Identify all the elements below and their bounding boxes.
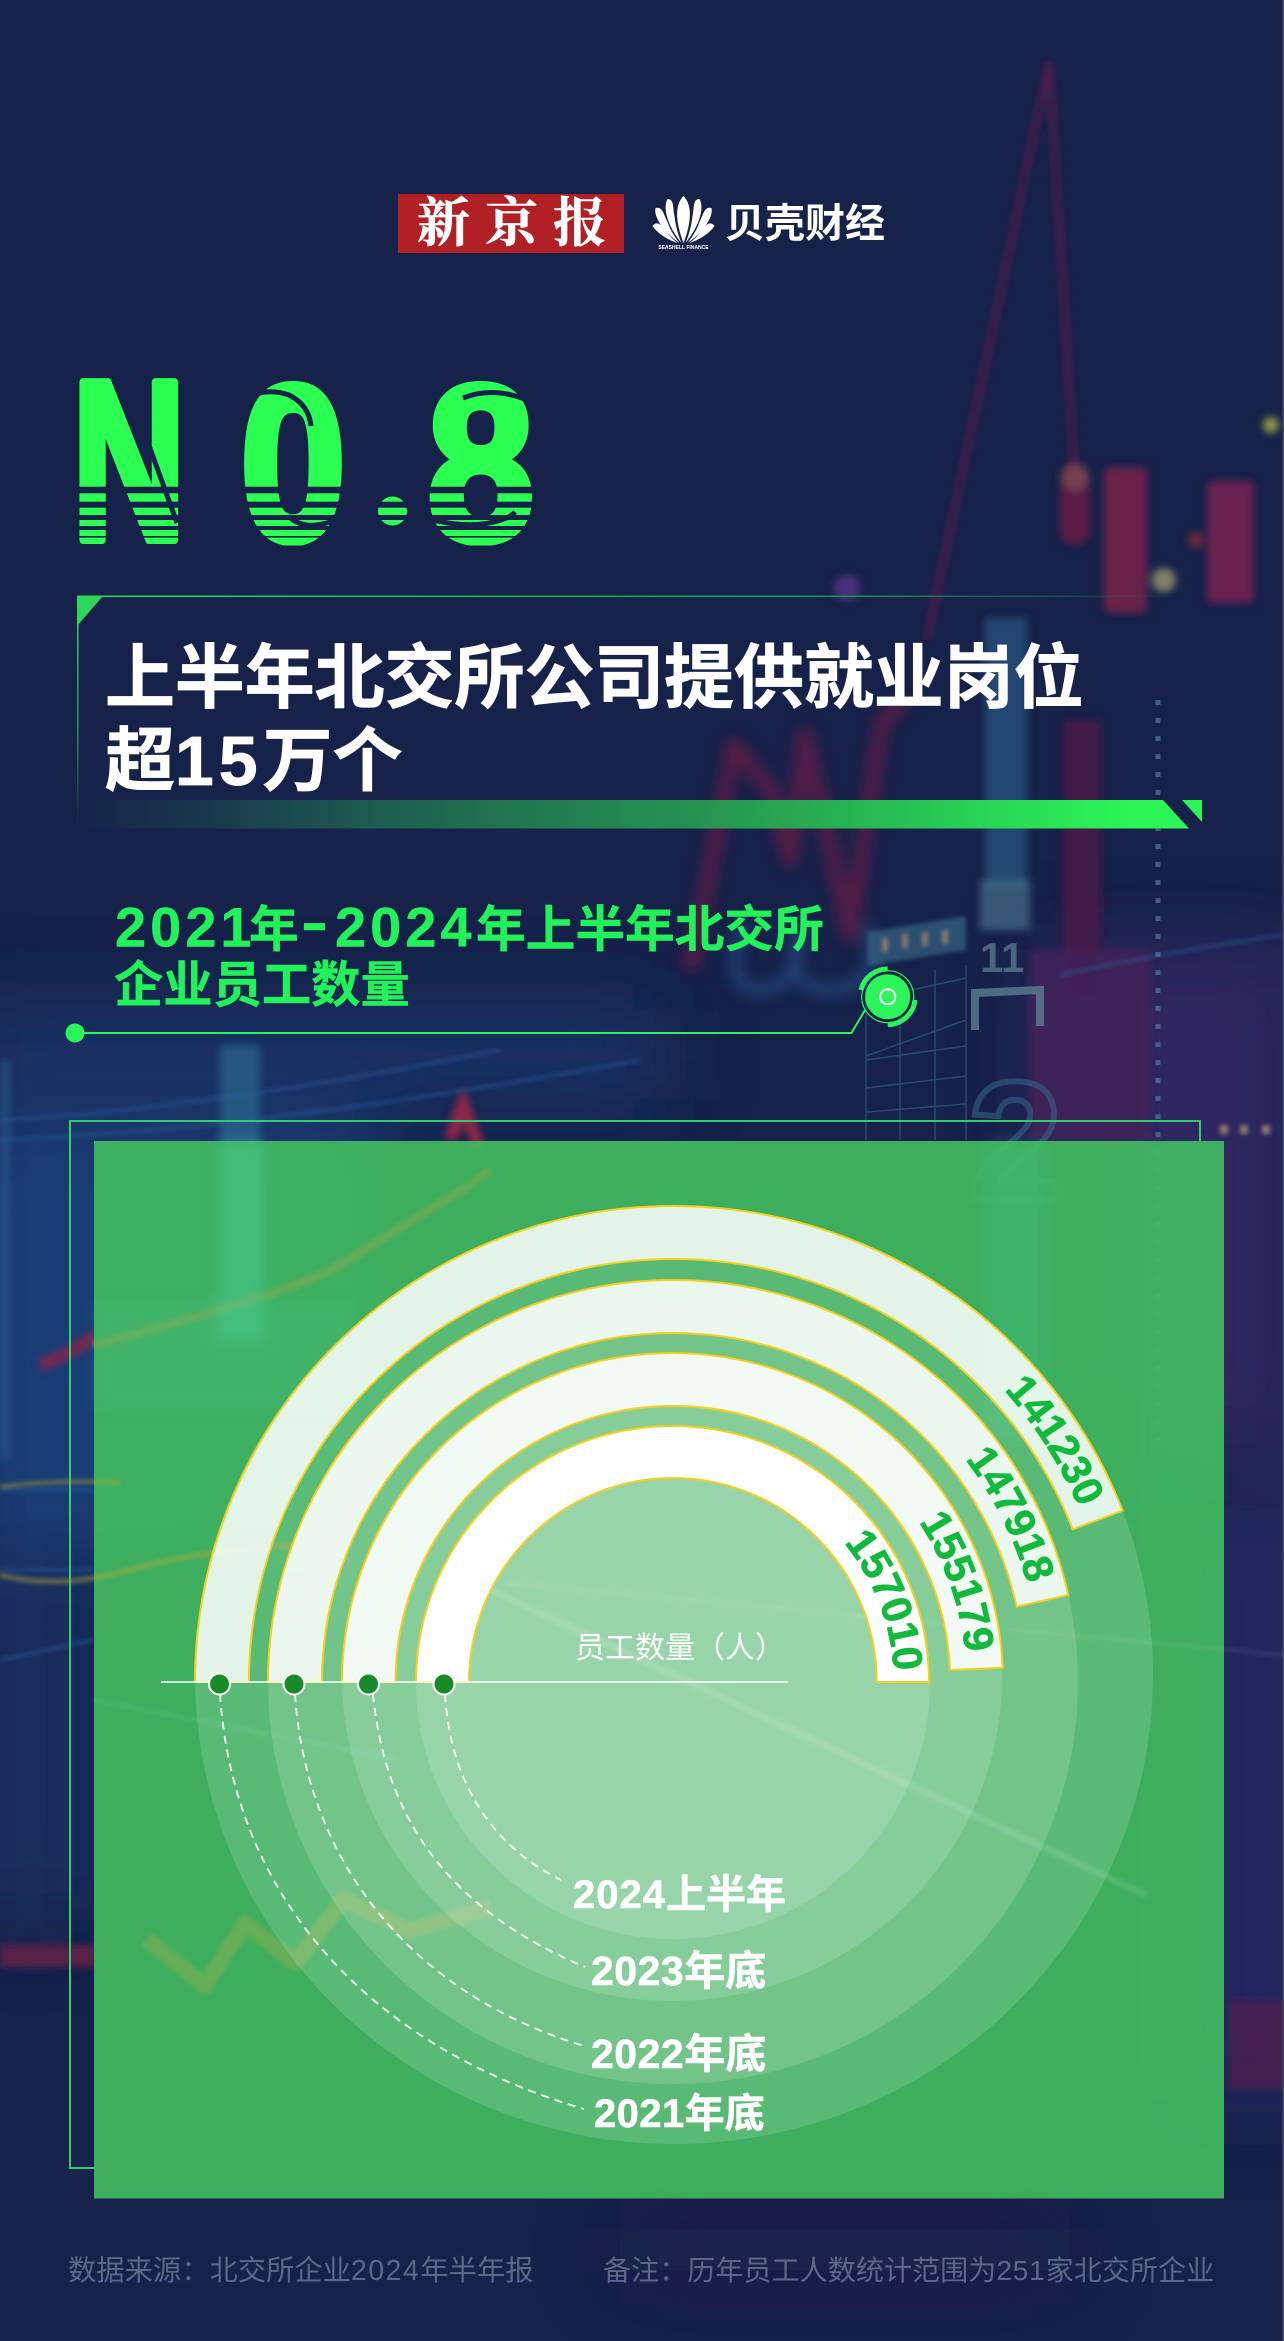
title panel frame — [77, 596, 1202, 828]
year labels: 2023年底 — [591, 1948, 766, 1994]
chart: radial bar 2022 — [267, 1279, 1070, 1683]
outer frame of chart — [70, 1121, 1200, 2168]
background numerals — [968, 934, 1063, 1237]
year labels: 2024上半年 — [573, 1873, 786, 1917]
chart: radial bar 2023: 155179 — [920, 1512, 994, 1650]
panel texture: teal tint from photo — [94, 1141, 1224, 1501]
subtitle: 年 — [249, 902, 299, 958]
subtitle leader line and target icon — [66, 969, 915, 1042]
subtitle: 企业员工数量 — [114, 958, 410, 1013]
chart: radial bar 2024: 157010 — [845, 1530, 922, 1669]
background numerals: 2 — [968, 1047, 1063, 1237]
title — [105, 639, 1083, 800]
icon: seashell: SEASHELL FINANCE — [658, 245, 709, 251]
axis dots — [209, 1674, 454, 1694]
accent bar — [77, 800, 1189, 828]
chart: concentric circles — [195, 1206, 1153, 2144]
footer: note: 备注：历年员工人数统计范围为251家北交所企业 — [603, 2255, 1214, 2286]
panel texture: light streaks — [0, 1170, 1284, 1986]
year labels: 2022年底 — [591, 2031, 766, 2077]
logo: 新京报: 新京报 — [417, 194, 621, 253]
subtitle: 2024 — [335, 896, 476, 958]
footer: source: 数据来源：北交所企业2024年半年报 — [68, 2254, 534, 2286]
axis label: 员工数量（人） — [575, 1632, 785, 1665]
title: 上半年北交所公司提供就业岗位 — [105, 639, 1083, 717]
big number: NO.8: 8 — [427, 340, 534, 588]
logo: 贝壳财经 — [652, 196, 885, 251]
chart: radial bar 2023 — [341, 1352, 1004, 1683]
dashed connectors — [220, 1694, 585, 2109]
year labels — [573, 1873, 786, 2136]
chart: radial bar 2021 — [194, 1205, 1124, 1683]
year labels: 2021年底 — [594, 2092, 765, 2136]
subtitle: 年上半年北交所 — [476, 902, 824, 958]
subtitle — [114, 890, 824, 1013]
background numerals: 11 — [980, 934, 1024, 981]
logo: 贝壳财经: 贝壳财经 — [725, 202, 885, 246]
icon: target — [861, 969, 915, 1024]
chart: radial bar 2024 — [415, 1425, 930, 1683]
chart: radial bar 2022: 147918 — [966, 1447, 1054, 1582]
panel: chart background — [94, 1141, 1224, 2198]
big number: NO.8 — [70, 333, 540, 588]
chart: radial bar 2021: 141230 — [1006, 1376, 1102, 1504]
big number: NO.8: 0 — [240, 339, 346, 587]
axis line — [161, 1681, 788, 1683]
title: 超15万个 — [105, 722, 402, 800]
subtitle: - — [301, 890, 328, 953]
big number: NO.8: N — [72, 333, 186, 588]
icon: seashell — [652, 196, 714, 251]
subtitle: 2021 — [115, 896, 256, 958]
